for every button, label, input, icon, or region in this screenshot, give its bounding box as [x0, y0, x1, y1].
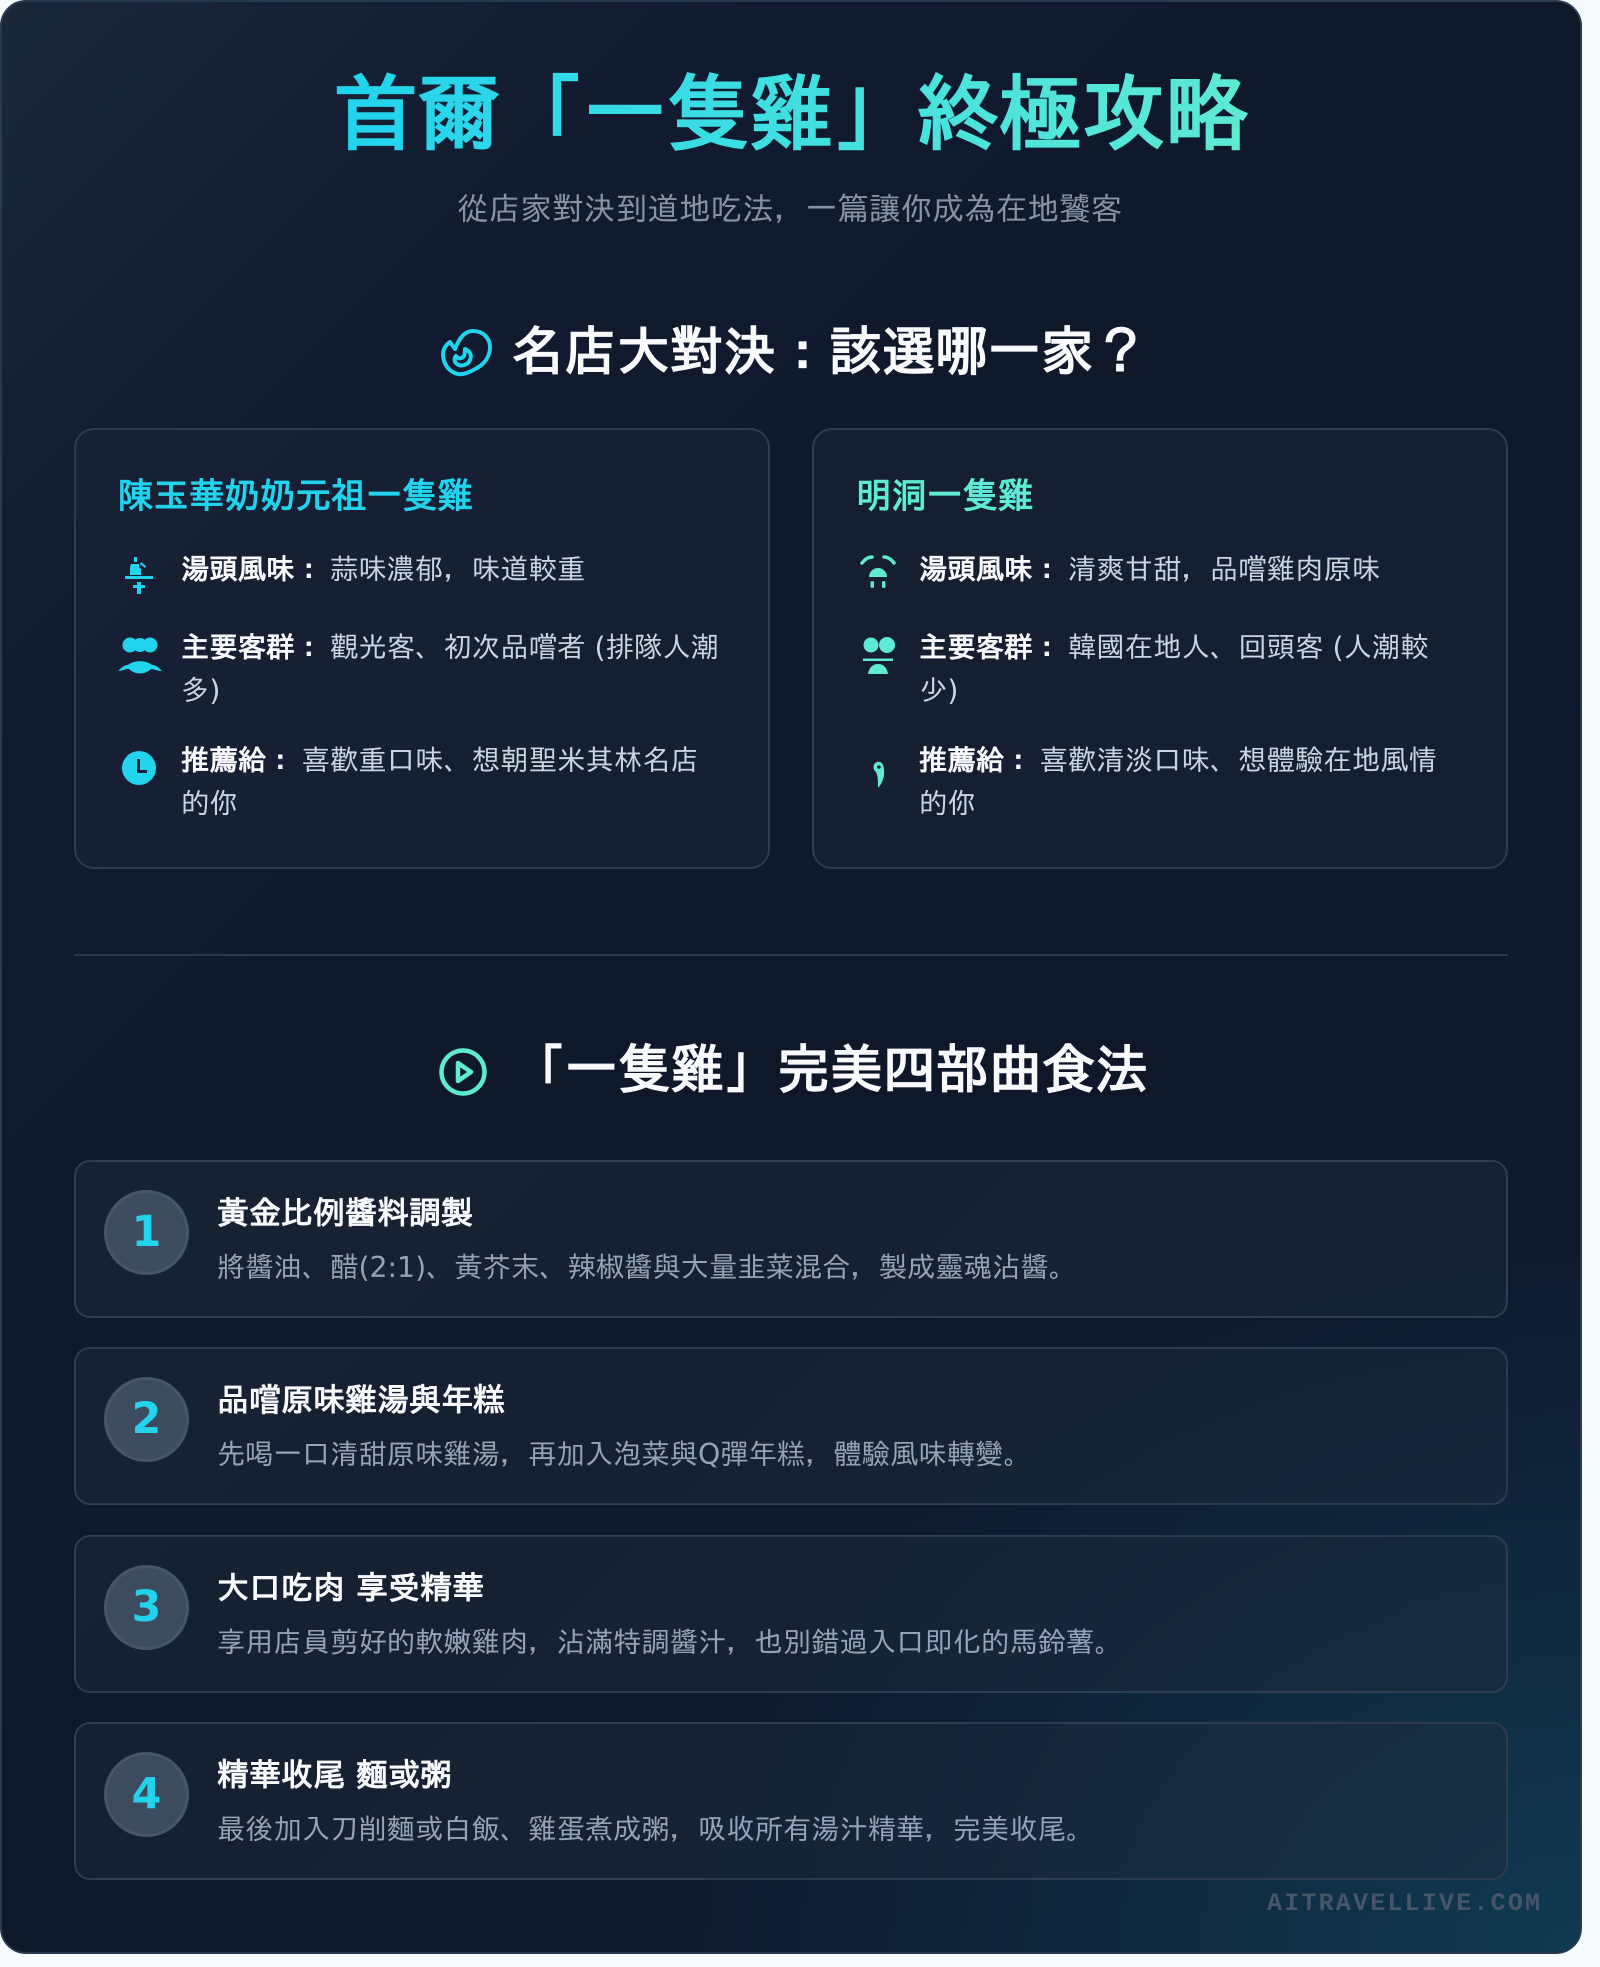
- subtitle: 從店家對決到道地吃法，一篇讓你成為在地饕客: [457, 192, 1122, 228]
- divider: [74, 954, 1508, 956]
- step number 1: 1: [132, 1207, 161, 1257]
- step 1: [74, 1160, 1508, 1318]
- item: main customers 2: [919, 631, 1429, 707]
- step 3 title: 大口吃肉 享受精華: [217, 1569, 484, 1607]
- icon: flame: [441, 329, 492, 376]
- item: main customers 2: 主要客群：韓國在地人、回頭客 (人潮較: [919, 631, 1429, 664]
- icon: locals: [863, 637, 895, 674]
- item: main customers 1: 主要客群：觀光客、初次品嚐者 (排隊人潮: [181, 631, 719, 664]
- step 1 title: 黃金比例醬料調製: [217, 1194, 473, 1232]
- panel: shop card 1: [74, 428, 770, 869]
- step 2 description: 先喝一口清甜原味雞湯，再加入泡菜與Q彈年糕，體驗風味轉變。: [217, 1438, 1032, 1471]
- card title: shop 1: 陳玉華奶奶元祖一隻雞: [118, 476, 473, 517]
- item: main customers 1: 多): [181, 674, 220, 707]
- step 4 description: 最後加入刀削麵或白飯、雞蛋煮成粥，吸收所有湯汁精華，完美收尾。: [217, 1813, 1094, 1846]
- item: recommended for 2: 推薦給：喜歡清淡口味、想體驗在地風情: [919, 744, 1437, 777]
- item: main customers 1: [181, 631, 719, 707]
- card title: shop 2: 明洞一隻雞: [856, 476, 1034, 517]
- step 2: [74, 1347, 1508, 1505]
- item: soup flavour 1: 湯頭風味：蒜味濃郁，味道較重: [181, 553, 585, 586]
- item: recommended for 1: [181, 744, 699, 820]
- section heading: four-step eating method: 「一隻雞」完美四部曲食法: [512, 1040, 1148, 1101]
- item: recommended for 2: 的你: [919, 787, 976, 820]
- step number 2: 2: [132, 1394, 161, 1444]
- title: 首爾「一隻雞」終極攻略: [334, 66, 1249, 163]
- icon: comma leaf: [874, 762, 884, 788]
- item: soup flavour 2: 湯頭風味：清爽甘甜，品嚐雞肉原味: [919, 553, 1380, 586]
- step number 4: [104, 1752, 189, 1837]
- step 4: [74, 1722, 1508, 1880]
- icon: light soup: [860, 555, 896, 588]
- watermark: AITRAVELLIVE.COM: [1267, 1889, 1542, 1918]
- step number 3: [104, 1565, 189, 1650]
- item: recommended for 2: [919, 744, 1437, 820]
- step number 3: 3: [132, 1582, 161, 1632]
- step number 1: [104, 1190, 189, 1275]
- step number 4: 4: [132, 1769, 161, 1819]
- item: recommended for 1: 推薦給：喜歡重口味、想朝聖米其林名店: [181, 744, 699, 777]
- section heading: shop showdown: 名店大對決：該選哪一家？: [511, 322, 1147, 383]
- step 4 title: 精華收尾 麵或粥: [217, 1756, 452, 1794]
- step 3 description: 享用店員剪好的軟嫩雞肉，沾滿特調醬汁，也別錯過入口即化的馬鈴薯。: [217, 1626, 1122, 1659]
- icon: clock: [122, 751, 156, 785]
- step 3: [74, 1535, 1508, 1693]
- item: recommended for 1: 的你: [181, 787, 238, 820]
- icon: soup bottle: [125, 557, 153, 594]
- item: main customers 2: 少): [919, 674, 958, 707]
- step 1 description: 將醬油、醋(2:1)、黃芥末、辣椒醬與大量韭菜混合，製成靈魂沾醬。: [217, 1251, 1077, 1284]
- panel: shop card 2: [812, 428, 1508, 869]
- step 2 title: 品嚐原味雞湯與年糕: [217, 1381, 505, 1419]
- icon: people: [118, 638, 162, 674]
- step number 2: [104, 1377, 189, 1462]
- icon: play circle: [439, 1048, 487, 1096]
